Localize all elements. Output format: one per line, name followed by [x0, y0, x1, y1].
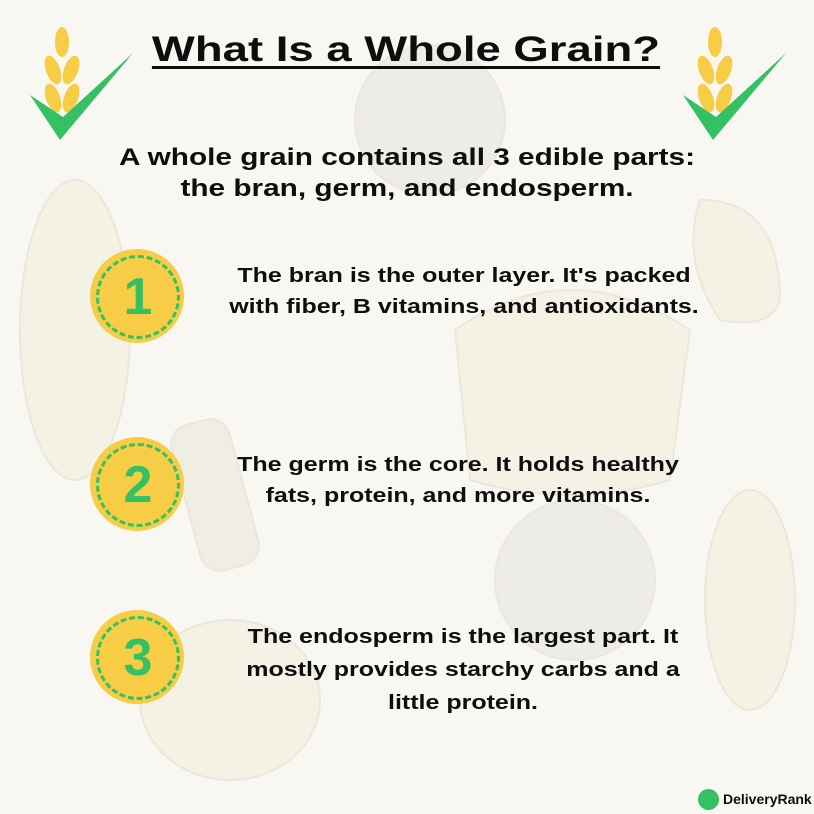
subtitle — [119, 144, 695, 202]
badge 2 — [90, 437, 184, 531]
text 1: The bran is the outer layer. It's packed — [237, 265, 691, 287]
subtitle: the bran, germ, and endosperm. — [180, 175, 634, 202]
subtitle: A whole grain contains all 3 edible parts: — [119, 144, 695, 171]
icon: wheat check right — [683, 27, 786, 140]
icon: wheat check left — [30, 27, 133, 140]
text 1 — [229, 265, 699, 318]
badge 3 — [90, 610, 184, 704]
badge 1: 1 — [124, 268, 152, 326]
text 2: The germ is the core. It holds healthy — [237, 454, 679, 476]
logo: DeliveryRank — [723, 791, 812, 807]
text 3: mostly provides starchy carbs and a — [246, 659, 680, 681]
text 2: fats, protein, and more vitamins. — [266, 485, 650, 507]
text 3: little protein. — [388, 692, 538, 714]
text 2 — [237, 454, 679, 507]
text 3 — [246, 626, 680, 714]
text 1: with fiber, B vitamins, and antioxidants. — [229, 296, 699, 318]
text 3: The endosperm is the largest part. It — [248, 626, 678, 648]
logo — [698, 789, 812, 810]
badge 3: 3 — [124, 629, 152, 687]
title: What Is a Whole Grain? — [152, 30, 660, 69]
badge 2: 2 — [124, 456, 152, 514]
badge 1 — [90, 249, 184, 343]
